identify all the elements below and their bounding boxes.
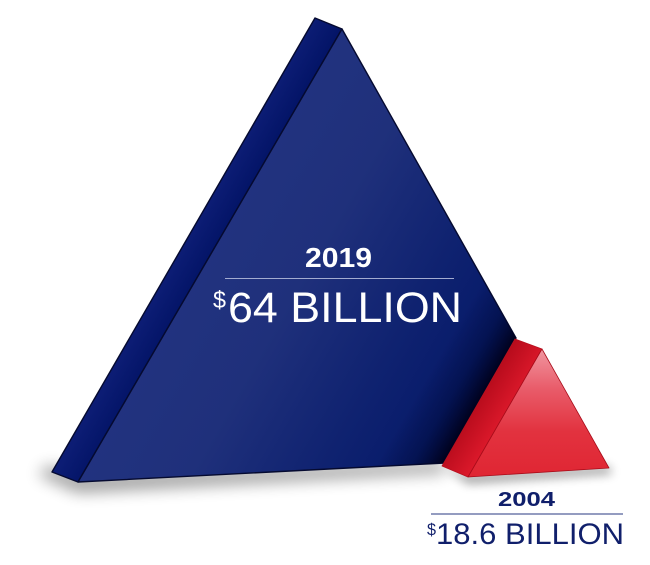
value $18.6 billion: $ bbox=[427, 520, 437, 539]
label: 2004 $18.6 billion bbox=[427, 489, 624, 551]
value $64 billion: 64 BILLION bbox=[228, 285, 462, 332]
shadow cast by small triangle bbox=[78, 29, 516, 482]
value $64 billion: $ bbox=[213, 287, 226, 314]
year 2019: 2019 bbox=[305, 242, 372, 273]
large triangle: 2019 bbox=[52, 18, 516, 482]
ground shadow: large triangle bbox=[38, 462, 445, 492]
value $18.6 billion: 18.6 BILLION bbox=[436, 518, 624, 551]
small triangle front face bbox=[468, 349, 609, 477]
year 2004: 2004 bbox=[498, 489, 556, 511]
large triangle front face bbox=[78, 29, 516, 482]
large triangle side face bbox=[52, 18, 342, 482]
label: 2019 $64 billion bbox=[213, 242, 462, 332]
small triangle: 2004 bbox=[442, 339, 609, 477]
small triangle side face bbox=[442, 339, 542, 477]
ground shadow: small triangle bbox=[445, 466, 612, 484]
